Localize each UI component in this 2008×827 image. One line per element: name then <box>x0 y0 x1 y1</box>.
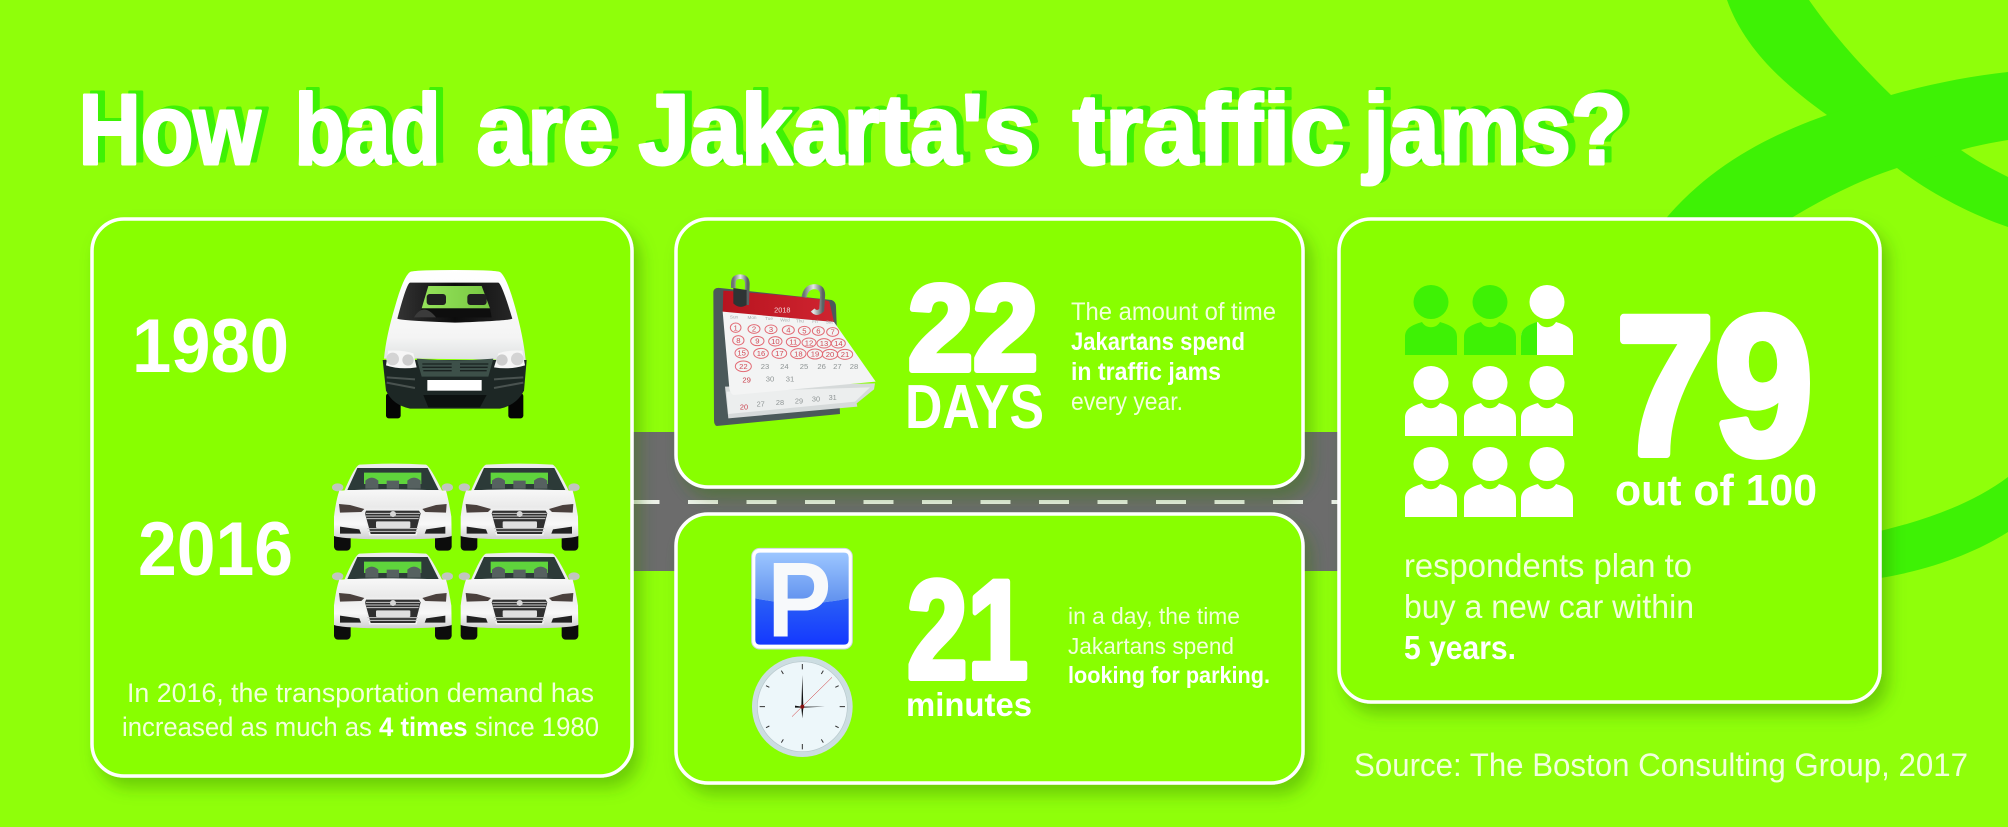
icon: calendar: 20 <box>826 350 834 359</box>
lower calendar pages: 29 <box>795 396 803 405</box>
icon: calendar: 9 <box>755 337 759 346</box>
title: are <box>476 74 614 186</box>
icon: calendar: 18 <box>794 349 803 358</box>
panel text <box>122 678 599 742</box>
icon: calendar: 14 <box>834 339 843 348</box>
title: How <box>86 71 268 183</box>
title: jams? <box>1369 71 1634 183</box>
icon: calendar: 29 <box>742 375 751 384</box>
calendar days: Mon <box>747 315 757 320</box>
icon: calendar: 26 <box>817 362 826 371</box>
icon: nine people, 2.3 of them green <box>1405 285 1573 517</box>
calendar days: Sun <box>730 314 739 319</box>
icon: calendar: 22 <box>739 362 748 371</box>
title: bad <box>302 71 448 183</box>
description <box>1071 298 1276 416</box>
minutes label: minutes <box>906 686 1032 723</box>
calendar days: Fri <box>812 319 818 324</box>
icon: calendar: 2018 <box>774 305 790 314</box>
lower calendar pages <box>740 393 837 411</box>
icon: calendar: 19 <box>811 350 819 359</box>
icon: calendar: 6 <box>816 327 820 336</box>
source: Source: The Boston Consulting Group, 2017 <box>1354 747 1968 783</box>
description <box>1404 547 1694 666</box>
decorative curved road bands <box>1663 0 2008 578</box>
icon: calendar: 15 <box>737 349 746 358</box>
out of 100 label: out of 100 <box>1615 466 1817 515</box>
title: traffic <box>1072 74 1344 186</box>
lower calendar pages: 27 <box>757 400 765 409</box>
calendar days: Thu <box>796 318 804 323</box>
panel text: In 2016, the transportation demand has <box>127 678 594 708</box>
calendar days: Sat <box>826 320 834 325</box>
icon: calendar: 31 <box>786 374 794 383</box>
title <box>78 71 1634 186</box>
icon: calendar: 17 <box>775 349 784 358</box>
description: Jakartans spend <box>1071 328 1245 356</box>
description: in a day, the time <box>1068 603 1240 629</box>
road <box>630 432 1340 571</box>
icon: calendar: 25 <box>800 362 808 371</box>
title: traffic <box>1080 71 1352 183</box>
icon: calendar: 13 <box>820 339 828 348</box>
description <box>1068 603 1270 688</box>
DAYS label: DAYS <box>905 373 1044 442</box>
description: Jakartans spend <box>1068 633 1234 659</box>
icon: calendar: 10 <box>771 337 780 346</box>
icon: calendar: 8 <box>736 336 740 345</box>
title: bad <box>294 74 440 186</box>
number 79: 79 <box>1616 275 1813 496</box>
calendar days: Wed <box>780 317 790 322</box>
description: in traffic jams <box>1071 358 1221 386</box>
year 1980: 1980 <box>132 304 289 389</box>
panel: 22 days <box>676 219 1303 487</box>
calendar days <box>730 314 834 325</box>
title: Jakarta's <box>638 74 1034 186</box>
panel: 21 minutes <box>676 514 1303 783</box>
description: looking for parking. <box>1068 662 1270 688</box>
icon: calendar: 3 <box>769 325 773 334</box>
icon: calendar: 24 <box>780 362 789 371</box>
icon: calendar: 23 <box>761 362 769 371</box>
icon: calendar: 12 <box>805 338 813 347</box>
title: Jakarta's <box>646 71 1042 183</box>
icon: white van <box>383 270 527 418</box>
title: How <box>78 74 261 186</box>
icon: calendar: 7 <box>831 328 835 337</box>
icon: four white cars <box>332 464 580 640</box>
icon: calendar <box>713 277 876 426</box>
panel text: increased as much as 4 times since 1980 <box>122 712 599 742</box>
number 22: 22 <box>908 260 1038 396</box>
panel: vehicles 1980 vs 2016 <box>92 219 632 776</box>
icon: calendar: 21 <box>841 350 849 359</box>
icon: calendar: 1 <box>734 323 738 332</box>
icon: parking sign: P <box>767 540 831 660</box>
icon: calendar: 2 <box>752 325 756 334</box>
lower calendar pages: 31 <box>829 393 837 402</box>
description: 5 years. <box>1404 629 1516 666</box>
icon: clock <box>752 656 853 757</box>
icon: calendar: 4 <box>786 326 791 335</box>
lower calendar pages: 20 <box>740 402 748 411</box>
title: are <box>484 71 620 183</box>
description: buy a new car within <box>1404 588 1694 625</box>
description: every year. <box>1071 388 1183 416</box>
icon: calendar: 11 <box>789 338 797 347</box>
lower calendar pages: 28 <box>776 398 784 407</box>
icon: calendar: 27 <box>833 362 842 371</box>
calendar days: Tue <box>765 316 773 321</box>
icon: calendar: 16 <box>757 349 765 358</box>
panel: 79 out of 100 <box>1339 219 1880 702</box>
icon: calendar: 30 <box>766 375 774 384</box>
year 2016: 2016 <box>138 507 293 592</box>
icon: calendar: 28 <box>850 362 858 371</box>
lower calendar pages: 30 <box>812 395 820 404</box>
number 21: 21 <box>907 551 1028 708</box>
title: jams? <box>1362 74 1626 186</box>
description: The amount of time <box>1071 298 1276 326</box>
description: respondents plan to <box>1404 547 1692 584</box>
icon: calendar: 5 <box>802 326 806 335</box>
